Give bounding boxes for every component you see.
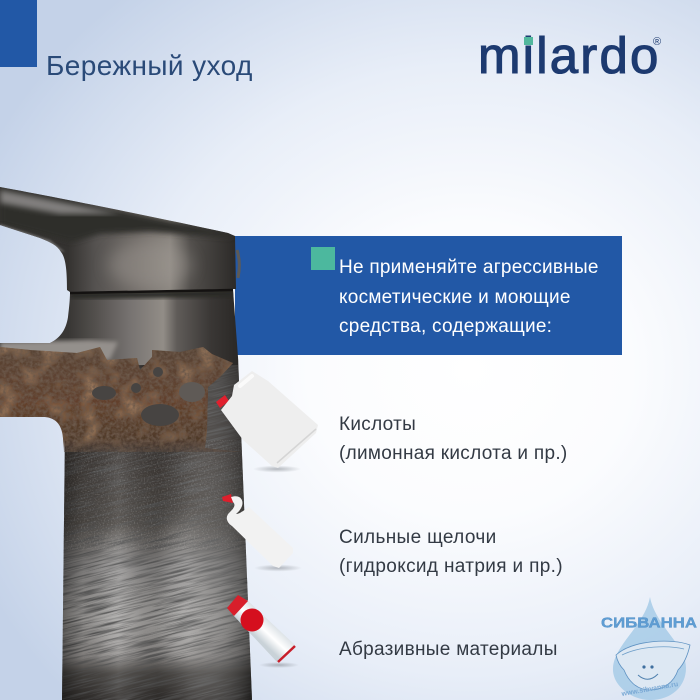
- logo: milardo: milardo: [478, 27, 661, 84]
- icon: canister: [216, 371, 318, 472]
- panel: warning: [235, 236, 622, 355]
- watermark: sibvanna: СИБВАННА: [601, 614, 697, 632]
- accent square: [0, 0, 37, 67]
- faucet illustration: [0, 187, 318, 700]
- logo: milardo: ®: [653, 36, 661, 48]
- icon: toilet cleaner bottle: [222, 494, 302, 572]
- label: acids: (лимонная кислота и пр.): [339, 443, 568, 464]
- title: Бережный уход: [46, 50, 253, 81]
- label: acids: Кислоты: [339, 414, 416, 435]
- watermark: sibvanna: [601, 598, 697, 700]
- label: alkalis: (гидроксид натрия и пр.): [339, 556, 563, 577]
- label: alkalis: [339, 527, 563, 577]
- label: abrasives: Абразивные материалы: [339, 639, 558, 660]
- warning text: [339, 257, 599, 337]
- watermark: sibvanna: www.sibvanna.ru: [620, 681, 679, 698]
- faucet handle: [0, 187, 239, 293]
- rust dark spots: [92, 367, 205, 426]
- faucet lower body with scratches: [62, 357, 252, 700]
- icon: abrasive tube: [227, 595, 299, 668]
- rust band: [0, 347, 242, 452]
- faucet collar: [0, 288, 240, 368]
- warning text: средства, содержащие:: [339, 316, 552, 337]
- warning text: Не применяйте агрессивные: [339, 257, 599, 278]
- label: alkalis: Сильные щелочи: [339, 527, 497, 548]
- label: acids: [339, 414, 568, 464]
- warning text: косметические и моющие: [339, 287, 571, 308]
- teal marker: [311, 247, 335, 270]
